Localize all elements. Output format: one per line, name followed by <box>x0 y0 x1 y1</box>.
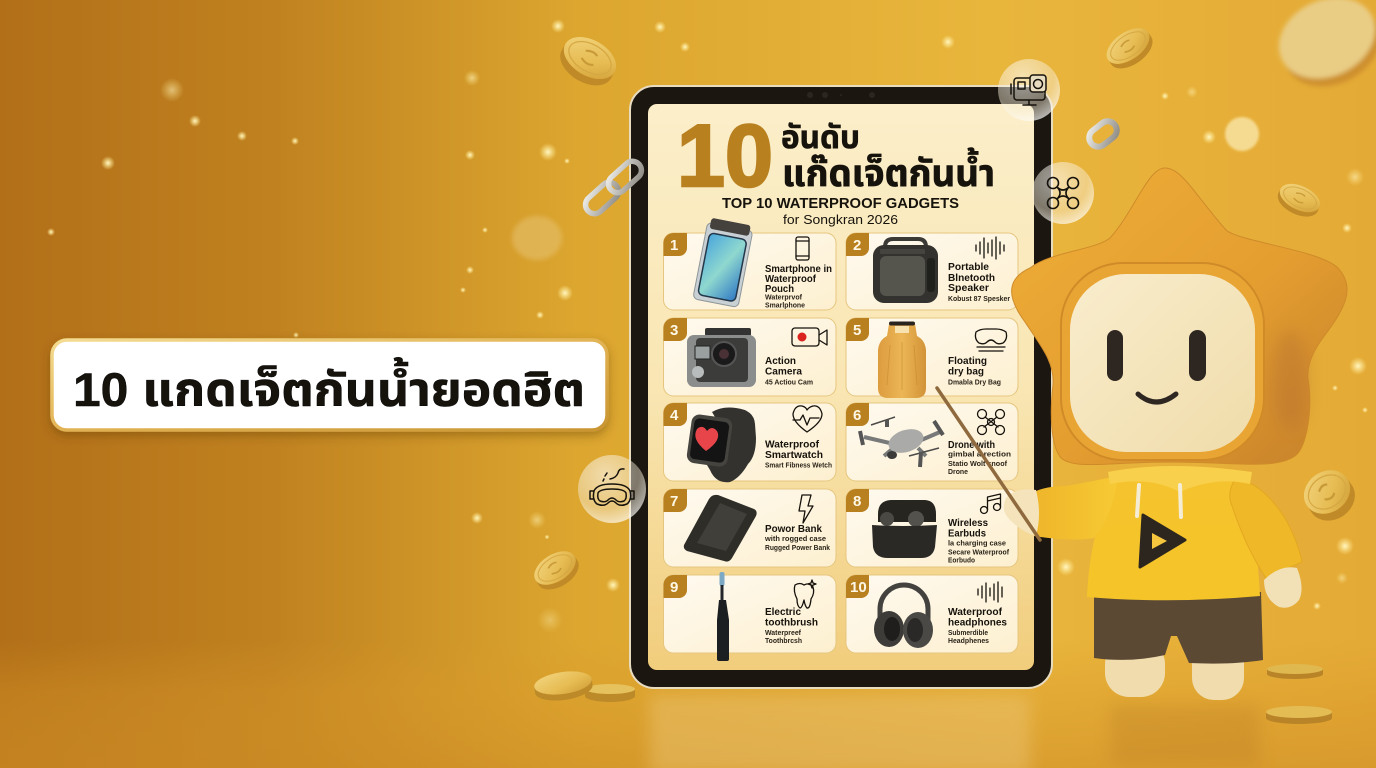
card 3 <box>664 318 836 396</box>
blurred large coin top right <box>1266 0 1376 102</box>
card 10: Headphenes <box>948 636 989 645</box>
icon: video camera <box>792 328 827 346</box>
hood inner rim <box>1061 263 1264 460</box>
card 8: la charging case <box>948 538 1006 548</box>
hoodie body <box>1087 467 1260 600</box>
title thai line 1: อันดับ <box>781 119 860 155</box>
card 7: Rugged Power Bank <box>765 543 831 552</box>
card 8: 8 <box>853 493 861 510</box>
product: smartwatch <box>686 408 756 482</box>
coin top right <box>1100 21 1159 76</box>
card 2: Kobust 87 Spesker <box>948 294 1010 303</box>
star character mascot <box>1004 168 1347 700</box>
banner: headline <box>52 340 607 430</box>
card 10: Submerdible <box>948 628 988 637</box>
card 5: Floating <box>948 355 987 367</box>
coin beside hoodie <box>1295 461 1363 530</box>
bubble: goggles icon <box>578 455 646 523</box>
bubble: drone icon <box>1032 162 1094 224</box>
card 7: 7 <box>670 493 678 510</box>
card 3: 3 <box>670 322 678 339</box>
subtitle line 2: for Songkran 2026 <box>783 212 898 227</box>
card 5: 5 <box>853 322 861 339</box>
tablet screen <box>648 104 1034 670</box>
coin stack on floor left <box>533 668 635 704</box>
right sleeve <box>1230 478 1302 578</box>
chain link right <box>1086 118 1120 150</box>
card 6: 6 <box>853 407 861 424</box>
bokeh light particles <box>47 19 1368 633</box>
icon: drone outline <box>978 410 1004 434</box>
coin on floor right back <box>1267 664 1323 679</box>
left leg and foot <box>1105 640 1165 697</box>
tablet body <box>630 86 1052 688</box>
pointer stick <box>937 388 1040 540</box>
title number: 10 <box>677 106 773 205</box>
card 3: 45 Actiou Cam <box>765 378 813 386</box>
shadow on star right arm <box>1272 330 1308 430</box>
product: earbuds case <box>872 500 937 558</box>
card 4: Waterproof <box>765 438 819 450</box>
card 4: Smart Fibness Wetch <box>765 460 832 470</box>
card 1: Waterproof <box>765 273 816 285</box>
title thai line 2: แก๊ดเจ็ตกันน้ำ <box>782 147 995 194</box>
card 8: Earbuds <box>948 528 986 540</box>
icon: goggles and waves <box>975 329 1007 351</box>
card 1: Waterprvof <box>765 292 802 302</box>
camera dots <box>807 92 875 98</box>
card 4: Smartwatch <box>765 449 823 461</box>
card 1: Smarlphone <box>765 300 805 310</box>
card 5: dry bag <box>948 366 984 378</box>
card 4 <box>664 403 836 482</box>
card 9: 9 <box>670 579 678 596</box>
product: phone pouch <box>693 217 754 307</box>
chain link left <box>582 158 645 217</box>
right eye <box>1189 330 1206 381</box>
icon: smartphone <box>796 237 809 260</box>
coin lower left <box>528 544 585 596</box>
bubble: camera icon <box>998 59 1060 121</box>
icon: music note <box>980 494 1000 514</box>
banner: headline: 10 แกดเจ็ตกันน้ำยอดฮิต <box>73 357 585 416</box>
card 9: Waterpreef <box>765 628 801 637</box>
subtitle: TOP 10 WATERPROOF GADGETS <box>722 195 959 212</box>
card 4: 4 <box>670 407 679 424</box>
card 1: Pouch <box>765 283 794 295</box>
card 8: Eorbudo <box>948 556 975 564</box>
card 8: Wireless <box>948 517 988 529</box>
icon: sound wave <box>978 582 1002 602</box>
card 7: with rogged case <box>764 534 826 543</box>
card 2 <box>846 233 1018 310</box>
hood collar <box>1108 466 1252 492</box>
product: drone <box>860 417 943 467</box>
card 5 <box>846 318 1018 398</box>
card 1: 1 <box>670 237 678 254</box>
card 1 <box>664 217 836 310</box>
card 2: Portable <box>948 261 989 273</box>
icon: lightning <box>799 495 813 523</box>
card 3: Camera <box>765 366 802 378</box>
card 9 <box>664 572 836 661</box>
card 10: Waterproof <box>948 606 1002 618</box>
right leg and foot <box>1192 640 1244 700</box>
left eye <box>1107 330 1123 381</box>
product: electric toothbrush <box>717 572 729 661</box>
card 8 <box>846 489 1018 567</box>
card 3: Action <box>765 355 796 367</box>
tablet <box>630 86 1052 688</box>
product: power bank <box>684 495 757 562</box>
icon: heart rate <box>793 406 822 432</box>
product: speaker <box>873 239 938 303</box>
card 6: gimbal a rection <box>948 450 1011 458</box>
product: action camera <box>687 328 756 387</box>
card 6: Drone with <box>948 439 995 451</box>
card 6: Statio Wolt snoof <box>948 459 1007 468</box>
left sleeve <box>1032 476 1118 540</box>
card 2: 2 <box>853 237 861 254</box>
card 8: Secare Waterproof <box>948 548 1009 556</box>
coin right of star <box>1273 178 1325 222</box>
icon: tooth with sparkle <box>794 580 816 608</box>
card 9: Electric <box>765 606 801 618</box>
card 10 <box>846 575 1018 653</box>
card 9: Toothbrcsh <box>765 636 802 645</box>
card 9: toothbrush <box>765 616 818 628</box>
face <box>1070 274 1255 452</box>
card 7: Powor Bank <box>765 523 822 535</box>
product: dry bag <box>878 322 926 398</box>
card 2: Blnetooth <box>948 272 995 284</box>
hoodie logo play triangle <box>1140 515 1185 567</box>
card 10: 10 <box>850 579 867 596</box>
coin on floor right front <box>1266 706 1332 724</box>
card 6 <box>846 403 1018 481</box>
star head <box>1012 168 1347 465</box>
product: headphones <box>874 585 933 648</box>
left hand <box>1004 489 1039 536</box>
card 2: Speaker <box>948 282 989 294</box>
drawstrings <box>1137 485 1181 517</box>
card 1: Smartphone in <box>765 263 832 275</box>
card 7 <box>664 489 836 567</box>
right hand <box>1264 567 1302 608</box>
card 5: Dmabla Dry Bag <box>948 378 1001 386</box>
shorts <box>1094 592 1263 664</box>
icon: sound wave <box>976 237 1004 259</box>
card 6: Drone <box>948 467 968 476</box>
card 10: headphones <box>948 616 1007 628</box>
coin floating top left of tablet <box>553 28 623 94</box>
smile <box>1138 394 1176 402</box>
